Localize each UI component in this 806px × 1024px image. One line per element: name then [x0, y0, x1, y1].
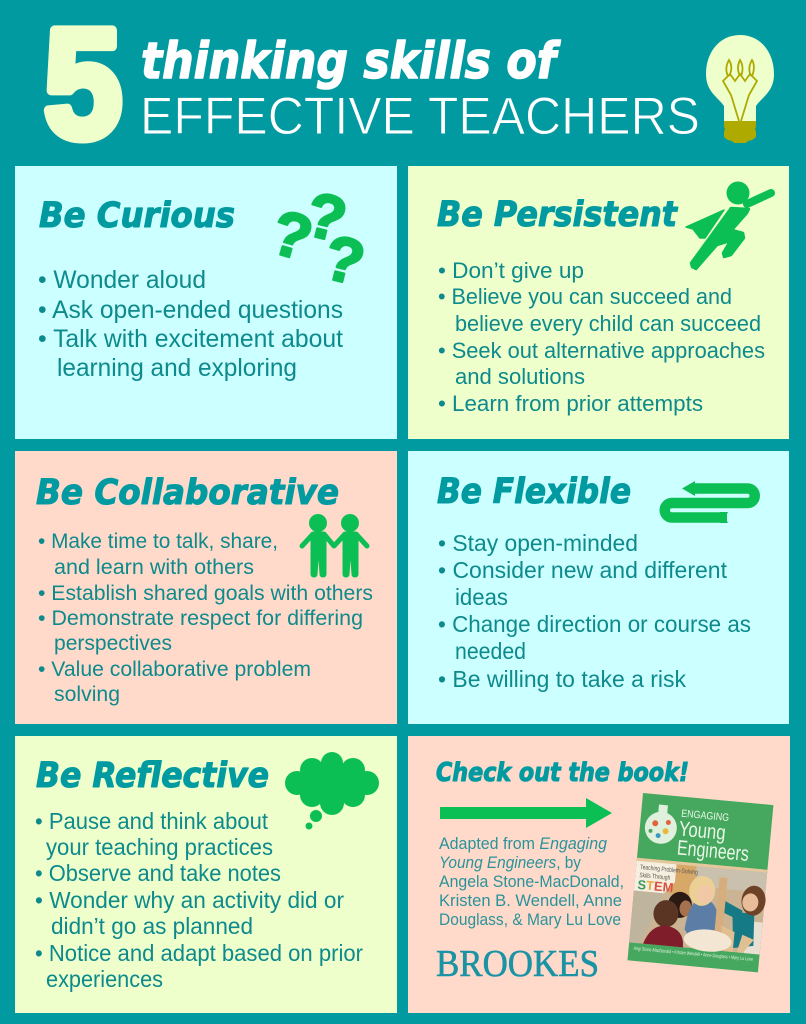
- heading: be persistent: Be Persistent: [437, 195, 678, 235]
- heading: be curious: Be Curious: [39, 196, 235, 236]
- heading: check out the book: Check out the book!: [436, 758, 689, 788]
- book authors: Angi Stone-MacDonald • Kristen Wendell • Anne Douglass • Mary Lu Love: [633, 946, 753, 963]
- heading: be flexible: Be Flexible: [437, 472, 631, 512]
- text block: curious bullets: • Ask open-ended questions: [38, 296, 343, 324]
- text block: reflective bullets: • Pause and think about: [35, 808, 269, 834]
- icon: superhero: [686, 182, 771, 269]
- panel: be flexible: [408, 451, 789, 724]
- book flask icon: [643, 803, 679, 845]
- icon: question marks: ?: [299, 179, 353, 256]
- big number 5: 5: [44, 0, 122, 170]
- panel: check out the book: [408, 736, 790, 1013]
- icon: question marks: [264, 179, 371, 299]
- book cover: STEM: [637, 877, 674, 895]
- text block: collaborative bullets: [38, 529, 373, 706]
- text block: flexible bullets: • Stay open-minded: [438, 530, 638, 556]
- text block: reflective bullets: didn’t go as planned: [51, 913, 253, 939]
- text block: collaborative bullets: solving: [54, 682, 120, 706]
- panel: be persistent: [408, 166, 789, 439]
- text block: collaborative bullets: • Value collaborative problem: [38, 657, 311, 681]
- text block: attribution: Adapted from Engaging: [439, 835, 608, 853]
- title line one: thinking skills of: [141, 32, 561, 90]
- text block: attribution: Angela Stone-MacDonald,: [439, 873, 624, 891]
- icon: question marks: ?: [317, 222, 371, 299]
- title line two: EFFECTIVE TEACHERS: [140, 87, 700, 146]
- book cover: Skills Through: [639, 872, 671, 882]
- arrow: [440, 798, 612, 828]
- icon: winding arrow: [665, 481, 755, 523]
- text block: reflective bullets: your teaching practices: [46, 834, 273, 860]
- book subtitle: Teaching Problem-Solving: [640, 864, 698, 876]
- icon: two children holding hands: [302, 514, 367, 577]
- text block: curious bullets: [38, 266, 343, 382]
- book cover: Engineers: [676, 836, 750, 866]
- panel: be curious: [15, 166, 397, 439]
- text block: persistent bullets: [438, 258, 765, 416]
- text block: collaborative bullets: perspectives: [54, 631, 172, 655]
- text block: attribution: Young Engineers, by: [439, 854, 582, 872]
- text block: persistent bullets: and solutions: [455, 364, 585, 389]
- heading: be reflective: Be Reflective: [36, 756, 269, 796]
- book cover: Young: [678, 818, 727, 845]
- text block: reflective bullets: • Observe and take notes: [35, 860, 281, 886]
- panel: be collaborative: [15, 451, 397, 724]
- text block: attribution: Douglass, & Mary Lu Love: [439, 911, 621, 929]
- text block: flexible bullets: • Be willing to take a risk: [438, 666, 686, 692]
- text block: reflective bullets: • Notice and adapt based on prior: [35, 940, 363, 966]
- book title: ENGAGING: [681, 808, 730, 824]
- text block: reflective bullets: [35, 808, 363, 992]
- book cover: [627, 793, 774, 972]
- text block: flexible bullets: [438, 530, 751, 692]
- text block: persistent bullets: • Don’t give up: [438, 258, 584, 283]
- text block: curious bullets: • Wonder aloud: [38, 266, 206, 294]
- text block: collaborative bullets: • Make time to talk, share,: [38, 529, 278, 553]
- text block: flexible bullets: • Change direction or course as: [438, 611, 751, 637]
- icon: thought cloud: [285, 752, 379, 830]
- logo: brookes: BROOKES: [436, 943, 599, 985]
- text block: attribution: Kristen B. Wendell, Anne: [439, 892, 622, 910]
- book photo: [629, 858, 768, 957]
- heading: be collaborative: Be Collaborative: [36, 473, 339, 513]
- text block: attribution: [439, 835, 624, 929]
- text block: curious bullets: • Talk with excitement about: [38, 325, 343, 353]
- text block: collaborative bullets: • Establish shared goals with others: [38, 581, 373, 605]
- text block: collaborative bullets: and learn with others: [54, 555, 254, 579]
- text block: curious bullets: learning and exploring: [57, 354, 297, 382]
- text block: persistent bullets: • Learn from prior attempts: [438, 391, 703, 416]
- text block: persistent bullets: • Seek out alternative approaches: [438, 338, 765, 363]
- icon: question marks: ?: [264, 197, 320, 275]
- panel: be reflective: [15, 736, 397, 1013]
- text block: flexible bullets: needed: [455, 638, 526, 664]
- title: [44, 0, 700, 170]
- icon: light bulb: [706, 35, 774, 143]
- text block: reflective bullets: • Wonder why an activity did or: [35, 887, 344, 913]
- text block: persistent bullets: • Believe you can succeed and: [438, 284, 732, 309]
- text block: reflective bullets: experiences: [46, 966, 163, 992]
- text block: collaborative bullets: • Demonstrate respect for differing: [38, 606, 363, 630]
- text block: persistent bullets: believe every child can succeed: [455, 311, 761, 336]
- text block: flexible bullets: ideas: [455, 584, 508, 610]
- text block: flexible bullets: • Consider new and different: [438, 557, 727, 583]
